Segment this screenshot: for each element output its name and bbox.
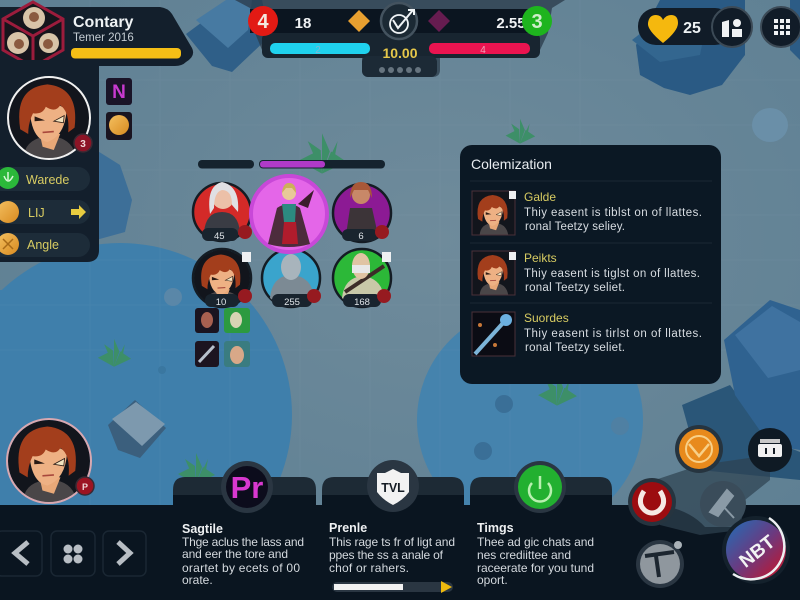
button: grid menu — [761, 7, 800, 47]
card: Prenle: chof or rahers. — [329, 561, 409, 575]
button: grey T — [636, 540, 684, 588]
left character panel — [0, 60, 99, 262]
crimson bar — [429, 43, 530, 56]
button: next — [103, 531, 146, 576]
card: Sagtile: orartet by ecets of 00 — [182, 561, 300, 575]
action buttons — [628, 425, 792, 588]
item: Galde — [472, 190, 702, 235]
blue stone block top — [186, 0, 270, 72]
item: Peikts: ronal Teetzy seliet. — [525, 282, 625, 294]
hero: green bandit: 168 — [354, 297, 370, 308]
card: Timgs — [470, 461, 612, 600]
item: Galde: Thiy easent is tiblst on of llattes. — [524, 207, 702, 219]
hero: white hair — [193, 182, 252, 242]
icon: Pr badge — [221, 461, 273, 513]
rock right — [752, 0, 800, 142]
left value: 18 — [295, 15, 311, 32]
yellow progress bar — [71, 48, 181, 58]
card: Prenle: ppes the ss a anale of — [329, 548, 444, 562]
ability row: LIJ: LIJ — [28, 206, 45, 220]
hero: grey mask: 255 — [284, 297, 300, 308]
item: Galde: ronal Teetzy seliey. — [525, 221, 625, 233]
bottom left portrait — [7, 419, 94, 503]
button: NBT — [722, 516, 790, 584]
hero: purple hood — [333, 182, 391, 242]
squad grid — [193, 176, 391, 308]
icon: TVL shield — [367, 460, 419, 512]
top center scoreboard — [235, 0, 565, 77]
card: Timgs: oport. — [477, 573, 508, 587]
card: Prenle: Prenle — [329, 521, 367, 535]
crimson bar: 4 — [480, 45, 486, 56]
card: Sagtile: and eer the tore and — [182, 547, 288, 561]
icon: green power — [514, 461, 566, 513]
hero: white hair: 45 — [214, 231, 225, 242]
button: inventory — [712, 7, 752, 47]
red team score: 4 — [257, 11, 269, 33]
button: previous — [0, 531, 42, 576]
lives count: 25 — [683, 20, 701, 37]
right value: 2.55 — [496, 15, 526, 32]
button: red horseshoe — [628, 478, 676, 526]
ability row: Angle — [0, 233, 90, 257]
icon: heart — [648, 15, 678, 43]
hero: green bandit — [333, 249, 391, 308]
hero: red hair — [193, 249, 252, 308]
icon: purple diamond — [428, 10, 450, 32]
card: Sagtile: Sagtile — [182, 522, 223, 536]
loot tiles — [195, 308, 250, 367]
player name: Contary — [73, 14, 134, 31]
icon: Pr badge: Pr — [231, 470, 263, 505]
item: Galde: Galde — [524, 190, 556, 204]
player subtitle: Temer 2016 — [73, 32, 134, 44]
blue stone block left — [96, 150, 132, 240]
green team score — [522, 6, 552, 36]
hero: red hair: 10 — [216, 297, 226, 308]
icon: TVL shield: TVL — [381, 481, 405, 495]
item: Peikts: Thiy easent is tiglst on of llattes. — [524, 268, 700, 280]
status icon: N: N — [112, 82, 126, 103]
cyan bar: 2 — [315, 45, 321, 56]
ability row: LIJ — [0, 200, 90, 224]
hero: selected magenta — [251, 176, 327, 252]
button: NBT: NBT — [736, 531, 780, 572]
card: Timgs: Thee ad gic chats and — [477, 535, 594, 549]
blue robot statue top right — [632, 0, 745, 95]
card: Timgs: Timgs — [477, 521, 514, 535]
ability row: Warede: Warede — [26, 173, 69, 187]
map plants and stones — [98, 119, 629, 484]
item: Peikts: Peikts — [524, 251, 557, 265]
status icon: coin — [106, 112, 132, 140]
hero: grey mask — [262, 249, 321, 308]
icon: orange diamond — [348, 10, 370, 32]
bottom dock — [0, 505, 800, 600]
item: Peikts — [472, 251, 700, 295]
card: Prenle: This rage ts fr of ligt and — [329, 535, 455, 549]
player header — [0, 2, 193, 67]
progress bar — [332, 581, 453, 593]
item: Suordes: Suordes — [524, 311, 569, 325]
panel heading: Colemization — [471, 156, 552, 172]
cyan bar — [270, 43, 370, 56]
portrait badge — [74, 134, 92, 152]
blue stone ruin right — [682, 300, 800, 480]
button: menu — [51, 531, 95, 576]
button: grey tool — [700, 481, 746, 527]
hero: purple hood: 6 — [358, 231, 364, 242]
button: dark chest — [748, 428, 792, 472]
item: Suordes — [472, 311, 702, 356]
icon: crimson cube — [3, 2, 63, 67]
portrait badge: 3 — [80, 139, 86, 150]
item: Suordes: Thiy easent is tirlst on of llattes. — [524, 328, 702, 340]
panel: colemization — [460, 145, 721, 384]
timer: 10.00 — [382, 45, 418, 61]
red team score — [248, 6, 278, 36]
item: Suordes: ronal Teetzy seliet. — [525, 342, 625, 354]
bottom left portrait: P — [82, 482, 88, 492]
arrow — [71, 205, 86, 219]
card: Timgs: nes crediittee and — [477, 548, 571, 562]
card: Timgs: raceerate for you tund — [477, 561, 594, 575]
squad bars — [198, 160, 385, 168]
green team score: 3 — [531, 11, 543, 33]
center timer icon — [381, 3, 417, 39]
status icon: N — [106, 78, 132, 105]
grey crate on map — [108, 400, 166, 458]
card: Sagtile: orate. — [182, 573, 213, 587]
card: Sagtile: Thge aclus the lass and — [182, 535, 304, 549]
top right lives and menus — [638, 7, 800, 47]
page dots — [379, 67, 421, 73]
card: Sagtile — [173, 461, 316, 600]
ability row: Warede — [0, 167, 90, 191]
card: Prenle — [322, 460, 464, 600]
button: orange — [675, 425, 723, 473]
portrait — [8, 77, 90, 159]
ability row: Angle: Angle — [27, 238, 59, 252]
